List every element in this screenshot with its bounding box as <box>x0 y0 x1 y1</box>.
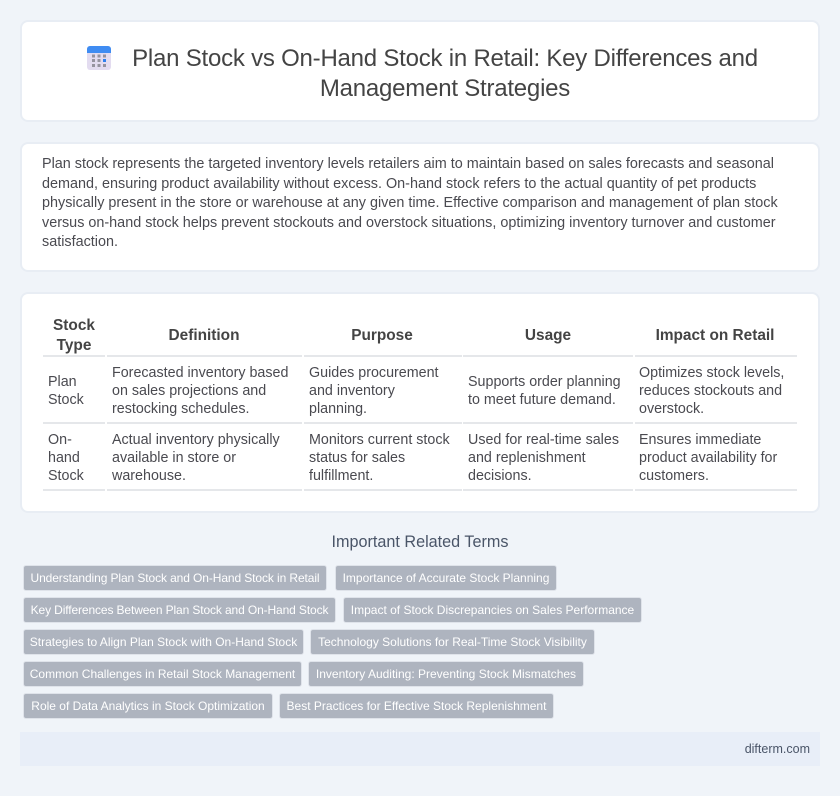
row: plan stock: Plan <box>48 374 77 390</box>
icon: calendar <box>87 46 111 70</box>
row: on-hand stock: fulfillment. <box>309 468 373 484</box>
tag list: related terms: Importance of Accurate Stock Planning <box>343 571 549 585</box>
footer bar <box>20 732 820 766</box>
table: comparison <box>43 317 797 491</box>
row: on-hand stock: On- <box>48 432 72 448</box>
table header: Type <box>57 336 91 354</box>
row: plan stock: on sales projections and <box>112 383 266 399</box>
row: on-hand stock: Monitors current stock <box>309 432 450 448</box>
text block: description: Plan stock represents the targeted inventory levels retailers aim to maintain based on sales forecasts and seasonal <box>42 156 774 172</box>
tag list: related terms: Best Practices for Effective Stock Replenishment <box>287 699 546 713</box>
text block: description: physically present in the store or warehouse at any given time. Effective comparison and management of plan stock <box>42 195 778 211</box>
title: Plan Stock vs On-Hand Stock in Retail: Key Differences and <box>132 45 758 72</box>
tag list: related terms: Common Challenges in Retail Stock Management <box>30 667 295 681</box>
row: plan stock: Optimizes stock levels, <box>639 365 784 381</box>
tag list: related terms <box>23 565 642 719</box>
title <box>132 45 758 102</box>
row: on-hand stock: Ensures immediate <box>639 432 761 448</box>
tag list: related terms: Inventory Auditing: Preventing Stock Mismatches <box>316 667 576 681</box>
row: plan stock: planning. <box>309 401 367 417</box>
table header: Definition <box>169 327 239 344</box>
tag list: related terms: Understanding Plan Stock and On-Hand Stock in Retail <box>31 571 319 585</box>
row: plan stock: to meet future demand. <box>468 392 616 408</box>
row: plan stock: and inventory <box>309 383 395 399</box>
text block: description <box>42 156 778 250</box>
text block: description: versus on-hand stock helps prevent stockouts and overstock situations, optimizing inventory turnover and customer <box>42 214 776 230</box>
table header: Usage <box>525 327 571 344</box>
row: on-hand stock: decisions. <box>468 468 532 484</box>
panel: title card <box>20 20 820 122</box>
tag list: related terms: Role of Data Analytics in Stock Optimization <box>31 699 265 713</box>
row: plan stock: Guides procurement <box>309 365 439 381</box>
tag list: related terms: Impact of Stock Discrepancies on Sales Performance <box>351 603 634 617</box>
row: plan stock: reduces stockouts and <box>639 383 782 399</box>
table header: Purpose <box>351 327 413 344</box>
row: plan stock <box>48 365 784 417</box>
row: plan stock: Forecasted inventory based <box>112 365 288 381</box>
panel: comparison table card <box>20 292 820 513</box>
row: on-hand stock: and replenishment <box>468 450 586 466</box>
row: on-hand stock: warehouse. <box>112 468 186 484</box>
row: on-hand stock: Used for real-time sales <box>468 432 619 448</box>
row: on-hand stock: available in store or <box>112 450 236 466</box>
row: on-hand stock: customers. <box>639 468 709 484</box>
row: on-hand stock: Actual inventory physically <box>112 432 280 448</box>
tag list: related terms: Technology Solutions for Real-Time Stock Visibility <box>318 635 587 649</box>
row: plan stock: overstock. <box>639 401 704 417</box>
row: on-hand stock <box>48 432 778 484</box>
tag list: related terms: Strategies to Align Plan Stock with On-Hand Stock <box>30 635 297 649</box>
table header <box>53 317 774 354</box>
row: on-hand stock: product availability for <box>639 450 777 466</box>
row: on-hand stock: Stock <box>48 468 84 484</box>
panel: description card <box>20 142 820 272</box>
heading: related terms: Important Related Terms <box>332 533 508 551</box>
tag list: related terms: Key Differences Between Plan Stock and On-Hand Stock <box>31 603 328 617</box>
text block: description: satisfaction. <box>42 234 118 250</box>
row: on-hand stock: status for sales <box>309 450 405 466</box>
table header: Impact on Retail <box>656 327 774 344</box>
title: Management Strategies <box>320 74 570 102</box>
row: plan stock: restocking schedules. <box>112 401 249 417</box>
text block: description: demand, ensuring product availability without excess. On-hand stock refers to the actual quantity of pet products <box>42 176 756 192</box>
footer brand: difterm.com <box>745 742 810 756</box>
row: on-hand stock: hand <box>48 450 80 466</box>
row: plan stock: Stock <box>48 392 84 408</box>
table header: Stock <box>53 317 95 334</box>
row: plan stock: Supports order planning <box>468 374 621 390</box>
